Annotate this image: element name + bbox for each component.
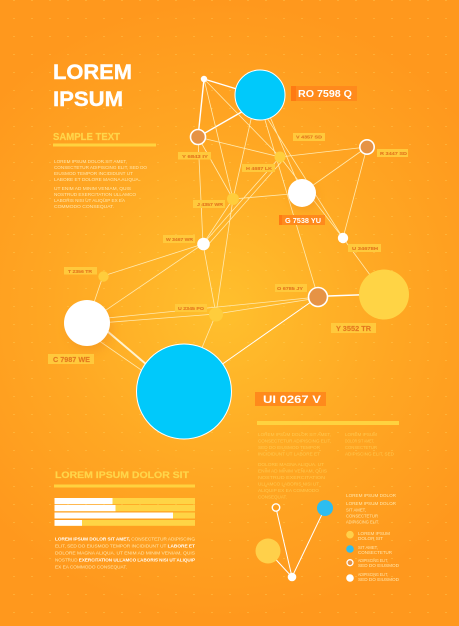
label: R 3447 SD: R 3447 SD	[380, 151, 408, 156]
label: V 4357 SD	[293, 133, 325, 141]
text block: right column one: CONSECTETUR ADIPISCING ELIT,	[258, 438, 331, 444]
network links	[85, 79, 384, 391]
label: T 2356 TR: T 2356 TR	[68, 269, 93, 274]
node: ring lower	[308, 288, 328, 306]
text block: intro: NOSTRUD EXERCITATION ULLAMCO	[54, 192, 137, 197]
title	[53, 61, 132, 111]
heading: lorem ipsum dolor sit	[54, 470, 195, 488]
text block: right column two: DOLOR SIT AMET,	[345, 438, 374, 444]
text block: bottom paragraph: LOREM IPSUM DOLOR SIT AMET, CONSECTETUR ADIPISCING	[55, 536, 196, 542]
heading: sample text: SAMPLE TEXT	[53, 132, 120, 143]
title: LOREM	[53, 61, 132, 84]
label: U 34678H: U 34678H	[352, 246, 379, 251]
legend item: white	[346, 572, 399, 582]
label: W 3467 WR	[163, 235, 195, 243]
legend heading	[346, 493, 396, 524]
text block: bottom paragraph: DOLORE MAGNA ALIQUA. UT ENIM AD MINIM VENIAM, QUIS	[55, 550, 195, 556]
text block: right column one: SED DO EIUSMOD TEMPOR	[258, 445, 320, 450]
text block: right column one: NOSTRUD EXERCITATION	[258, 475, 325, 480]
label: J 4357 WR	[193, 200, 225, 208]
label: R 3447 SD	[377, 149, 408, 157]
text block: right column one: ULLAMCO LABORIS NISI UT	[258, 482, 319, 486]
label: V 4357 SD: V 4357 SD	[296, 135, 323, 140]
text block: intro: LOREM IPSUM DOLOR SIT AMET,	[54, 159, 127, 164]
text block: right column two	[345, 432, 394, 456]
divider bar right	[257, 421, 399, 425]
node: ring left	[190, 130, 206, 144]
text block: right column two: LOREM IPSUM	[345, 432, 377, 437]
node: white small right	[338, 233, 348, 243]
label: C 7987 WE: C 7987 WE	[53, 355, 90, 364]
text block: right column two: ADIPISCING ELIT, SED	[345, 452, 394, 456]
text block: bottom paragraph: NOSTRUD EXERCITATION ULLAMCO LABORIS NISI UT ALIQUIP	[55, 558, 195, 562]
label: T 2356 TR	[64, 267, 97, 274]
text block: intro	[54, 159, 148, 209]
node: white small left	[197, 238, 210, 250]
label: Y 6843 IY: Y 6843 IY	[182, 154, 208, 159]
soft shadows under large circles	[68, 184, 317, 351]
node: white mid	[288, 179, 316, 207]
label: O 6785 JY	[275, 284, 307, 292]
legend heading: LOREM IPSUM DOLOR	[346, 493, 396, 498]
text block: right column one: ENIM AD MINIM VENIAM, QUIS	[258, 468, 327, 474]
label: RO 7598 Q: RO 7598 Q	[298, 89, 352, 100]
node: top small	[201, 76, 207, 82]
heading: sample text	[53, 132, 156, 146]
label: U 2345 PO	[175, 304, 207, 312]
node: ring right	[360, 140, 374, 154]
label: Y 3552 TR: Y 3552 TR	[336, 324, 372, 333]
label: W 3467 WR: W 3467 WR	[166, 237, 194, 242]
text block: intro: CONSECTETUR ADIPISCING ELIT, SED DO	[54, 165, 148, 170]
label: U 34678H	[348, 244, 381, 252]
legend item: ring	[347, 558, 399, 568]
legend heading: ADIPISCING ELIT.	[346, 520, 379, 524]
text block: right column one: DOLORE MAGNA ALIQUA. UT	[258, 462, 324, 467]
text block: intro: UT ENIM AD MINIM VENIAM, QUIS	[54, 186, 131, 191]
label: Y 6843 IY	[178, 152, 211, 160]
text block: right column one: ALIQUIP EX EA COMMODO	[258, 488, 320, 493]
node: white large left	[64, 300, 110, 346]
node: cyan large top	[235, 70, 285, 120]
text block: right column one: INCIDIDUNT UT LABORE ET	[258, 452, 320, 456]
label: H 4687 LK: H 4687 LK	[246, 166, 273, 171]
small network chart	[256, 500, 333, 581]
node: yellow small upper	[274, 152, 286, 162]
stacked bar chart	[54, 498, 195, 526]
text block: bottom paragraph: ELIT, SED DO EIUSMOD TEMPOR INCIDIDUNT UT LABORE ET	[55, 544, 195, 548]
title: IPSUM	[53, 88, 123, 111]
legend item: white: SED DO EIUSMOD	[358, 577, 399, 582]
legend heading: CONSECTETUR	[346, 514, 378, 518]
node: cyan large bottom	[136, 344, 232, 439]
legend item: yellow: DOLOR SIT	[358, 536, 383, 541]
text block: intro: EIUSMOD TEMPOR INCIDIDUNT UT	[54, 171, 133, 176]
legend item: ring: SED DO EIUSMOD	[358, 563, 399, 568]
node: yellow small mid	[227, 193, 239, 205]
legend item: cyan: SIT AMET,	[358, 545, 378, 550]
text block: intro: LABORIS NISI UT ALIQUIP EX EA	[54, 198, 125, 203]
legend item: ring: ADIPISCING ELIT,	[358, 558, 388, 563]
label: J 4357 WR: J 4357 WR	[197, 202, 224, 207]
node: yellow large right	[359, 270, 409, 320]
legend item: white: ADIPISCING ELIT,	[358, 572, 388, 577]
label: RO 7598 Q	[291, 86, 357, 101]
text block: right column one	[258, 432, 331, 500]
text block: bottom paragraph: EX EA COMMODO CONSEQUAT.	[55, 564, 127, 570]
text block: bottom paragraph	[55, 536, 196, 570]
label: O 6785 JY: O 6785 JY	[277, 286, 303, 291]
label: H 4687 LK	[242, 164, 275, 172]
node: yellow small lower	[209, 308, 223, 322]
network nodes	[64, 70, 409, 439]
text block: intro: COMMODO CONSEQUAT.	[54, 204, 114, 209]
node: yellow small left	[98, 271, 109, 282]
label: U 2345 PO: U 2345 PO	[178, 306, 204, 311]
text block: right column one: CONSEQUAT.	[258, 494, 287, 500]
legend	[346, 493, 399, 582]
legend item: cyan	[346, 545, 392, 555]
label: UI 0267 V: UI 0267 V	[263, 394, 322, 406]
text block: intro: LABORE ET DOLORE MAGNA ALIQUA.	[54, 177, 140, 182]
label: UI 0267 V	[255, 392, 326, 406]
legend item: cyan: CONSECTETUR	[358, 550, 392, 555]
legend heading: SIT AMET,	[346, 508, 366, 512]
legend item: yellow: LOREM IPSUM	[358, 531, 390, 536]
heading: lorem ipsum dolor sit: LOREM IPSUM DOLOR SIT	[55, 470, 189, 481]
text block: right column two: CONSECTETUR	[345, 445, 377, 450]
text block: right column one: LOREM IPSUM DOLOR SIT AMET,	[258, 432, 331, 437]
legend heading: LOREM IPSUM DOLOR	[346, 501, 396, 506]
legend item: yellow	[346, 531, 390, 541]
label: G 7538 YU: G 7538 YU	[285, 216, 321, 225]
